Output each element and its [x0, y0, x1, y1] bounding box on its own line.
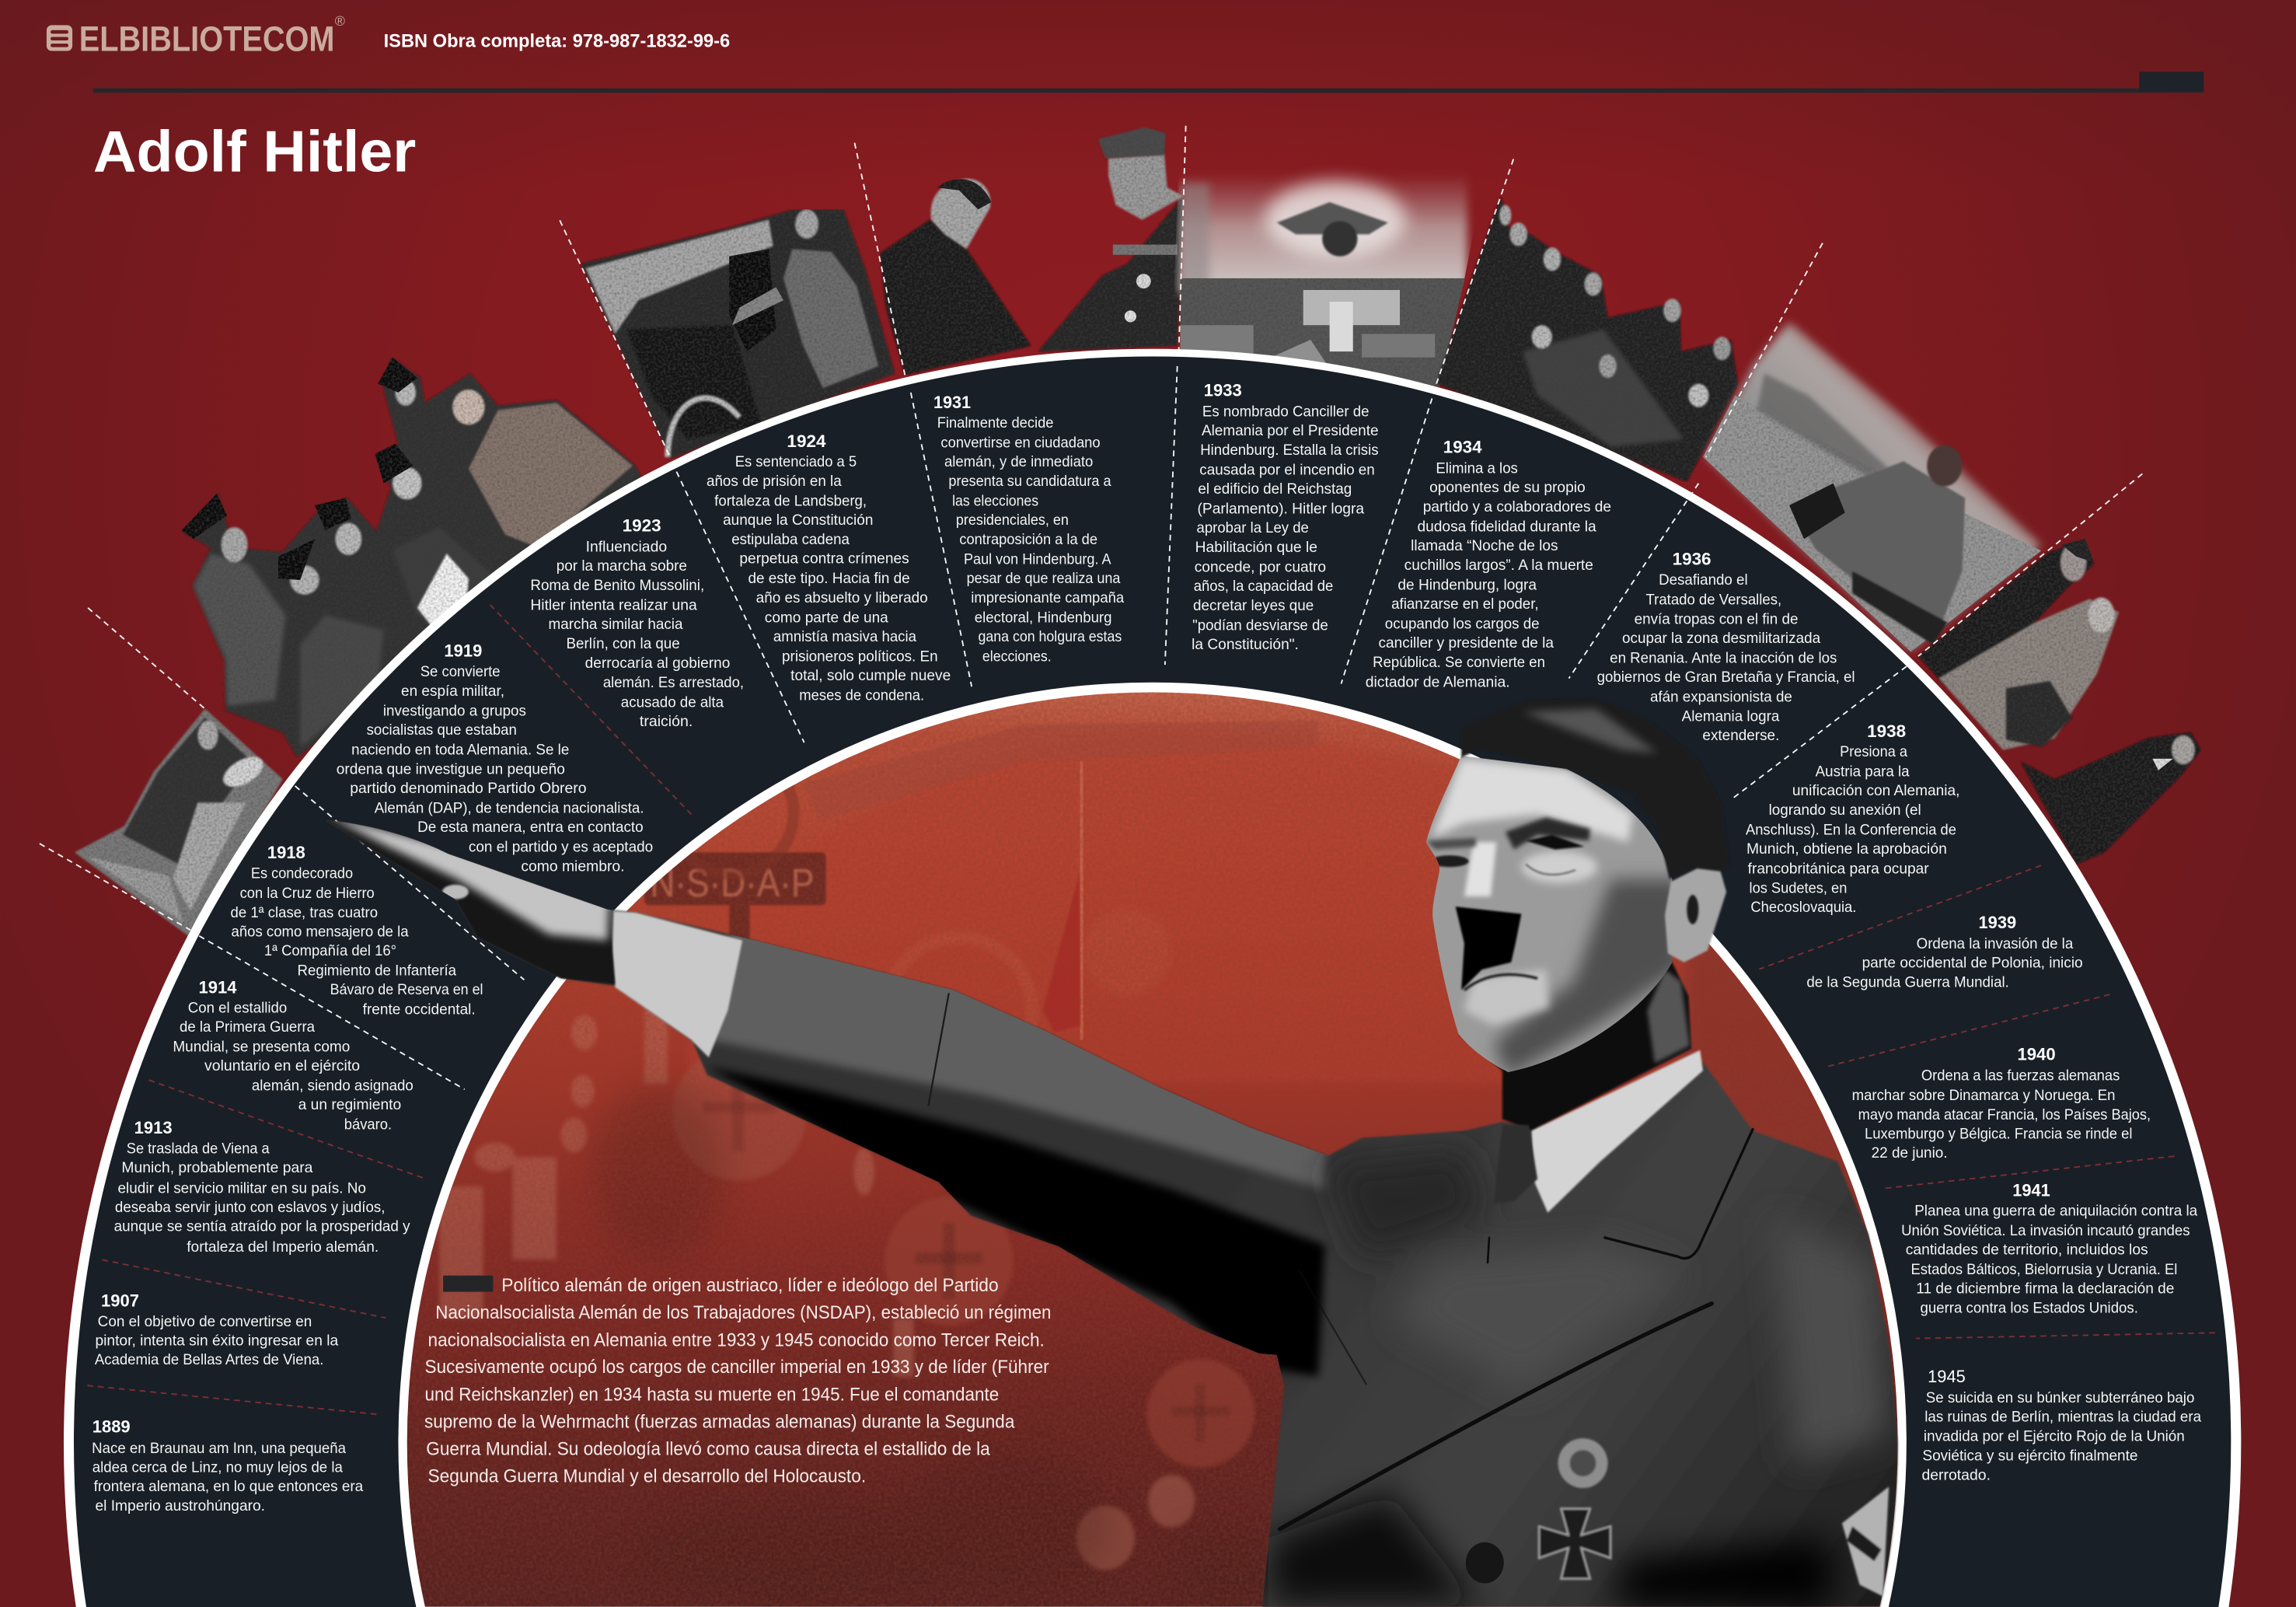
description: Planea una guerra de aniquilación contra la: [1914, 1203, 2197, 1220]
description: Roma de Benito Mussolini,: [530, 577, 704, 594]
eyes: [1526, 835, 1584, 850]
year: 1938: [1867, 721, 1906, 741]
description: ordena que investigue un pequeño: [337, 761, 565, 778]
photo: contemporaries: [1918, 539, 2201, 864]
hand: [325, 814, 615, 984]
description: [1901, 1203, 2197, 1317]
hair: [1461, 700, 1729, 879]
description: Hindenburg. Estalla la crisis: [1200, 442, 1379, 459]
panel: timeline ring: [64, 349, 2241, 1607]
description: como miembro.: [521, 858, 625, 875]
description: impresionante campaña: [971, 589, 1124, 606]
ear: [1665, 868, 1726, 962]
chin crease dark: [1464, 974, 1537, 990]
segment dividers: [87, 366, 2215, 1414]
description: deseaba servir junto con eslavos y judíos,: [115, 1199, 385, 1216]
description: de este tipo. Hacia fin de: [748, 570, 910, 587]
paragraph: und Reichskanzler) en 1934 hasta su muerte en 1945. Fue el comandante: [425, 1385, 999, 1406]
photo: world war i soldiers: [182, 358, 644, 757]
description: Hitler intenta realizar una: [530, 596, 697, 613]
paragraph: supremo de la Wehrmacht (fuerzas armadas alemanas) durante la Segunda: [424, 1412, 1015, 1432]
description: [1746, 743, 1959, 916]
hair sheen: [1523, 709, 1658, 753]
description: afán expansionista de: [1650, 688, 1792, 705]
timeline entry: 1907: [95, 1291, 338, 1368]
description: convertirse en ciudadano: [940, 434, 1101, 451]
paragraph: nacionalsocialista en Alemania entre 1933 y 1945 conocido como Tercer Reich.: [428, 1330, 1045, 1350]
description: Presiona a: [1840, 743, 1907, 760]
description: partido y a colaboradores de: [1423, 498, 1611, 515]
timeline entry: 1889: [92, 1417, 363, 1514]
description: por la marcha sobre: [557, 557, 687, 575]
year: 1941: [2012, 1181, 2050, 1200]
photo: car: [581, 209, 895, 459]
year: 1945: [1928, 1367, 1966, 1386]
description: llamada “Noche de los: [1411, 537, 1558, 554]
description: elecciones.: [982, 648, 1052, 665]
description: meses de condena.: [799, 686, 924, 704]
year: 1940: [2017, 1045, 2056, 1064]
description: los Sudetes, en: [1750, 880, 1847, 897]
year: 1936: [1673, 549, 1712, 568]
description: [1192, 403, 1379, 653]
paragraph: Segunda Guerra Mundial y el desarrollo del Holocausto.: [428, 1466, 866, 1486]
description: mayo manda atacar Francia, los Países Bajos,: [1858, 1106, 2151, 1123]
description: voluntario en el ejército: [204, 1057, 360, 1074]
description: contraposición a la de: [959, 531, 1097, 548]
logo: elbibliotecom: ®: [335, 13, 345, 29]
white dashed rays outside the arc: [40, 126, 2142, 930]
jaw shadow: [1494, 879, 1684, 1077]
description: Luxemburgo y Bélgica. Francia se rinde el: [1865, 1126, 2133, 1143]
year: 1914: [198, 977, 237, 997]
description: [337, 663, 653, 875]
iron cross: [1539, 1508, 1610, 1579]
inner ring white border: [398, 683, 1907, 1607]
description: [231, 865, 483, 1018]
description: guerra contra los Estados Unidos.: [1921, 1300, 2138, 1317]
description: decretar leyes que: [1193, 597, 1314, 614]
description: concede, por cuatro: [1195, 558, 1326, 575]
description: año es absuelto y liberado: [756, 589, 928, 606]
description: como parte de una: [765, 610, 888, 627]
description: Munich, obtiene la aprobación: [1746, 840, 1947, 858]
description: Habilitación que le: [1195, 539, 1317, 556]
description: [92, 1440, 363, 1514]
description: alemán, y de inmediato: [944, 453, 1093, 470]
description: perpetua contra crímenes: [739, 550, 909, 568]
description: Elimina a los: [1436, 459, 1518, 477]
description: Ordena la invasión de la: [1917, 935, 2073, 952]
description: (Parlamento). Hitler logra: [1197, 500, 1364, 517]
tie: [1494, 1125, 1537, 1204]
description: con el partido y es aceptado: [469, 838, 653, 855]
description: alemán, siendo asignado: [252, 1078, 413, 1095]
description: [95, 1313, 338, 1368]
description: frente occidental.: [363, 1001, 476, 1018]
photo: iron cross medals: [75, 709, 283, 938]
description: Con el objetivo de convertirse en: [98, 1313, 312, 1330]
description: Es sentenciado a 5: [735, 453, 857, 470]
description: años de prisión en la: [707, 473, 842, 490]
timeline entry: 1924: [707, 431, 951, 704]
button: [1466, 1542, 1504, 1583]
year: 1939: [1979, 913, 2016, 932]
description: logrando su anexión (el: [1769, 802, 1921, 819]
neck: [1458, 956, 1691, 1130]
header bar: [93, 72, 2204, 93]
description: invadida por el Ejército Rojo de la Unión: [1924, 1428, 2185, 1445]
isbn: ISBN Obra completa: 978-987-1832-99-6: [384, 32, 730, 52]
description: socialistas que estaban: [367, 721, 517, 739]
timeline entry: 1931: [933, 393, 1124, 665]
description: [707, 453, 951, 704]
shirt collar: [1532, 1050, 1703, 1213]
description: años como mensajero de la: [231, 924, 409, 941]
description: dictador de Alemania.: [1366, 673, 1510, 690]
year: 1933: [1204, 381, 1242, 400]
timeline entry: 1939: [1806, 913, 2083, 991]
description: partido denominado Partido Obrero: [350, 780, 587, 797]
description: acusado de alta: [621, 693, 724, 711]
timeline entry: 1918: [231, 843, 483, 1018]
description: Es nombrado Canciller de: [1202, 403, 1370, 420]
description: Nace en Braunau am Inn, una pequeña: [92, 1440, 346, 1457]
description: con la Cruz de Hierro: [240, 885, 375, 902]
brows: [1506, 817, 1590, 850]
description: de la Segunda Guerra Mundial.: [1806, 974, 2009, 991]
description: Tratado de Versalles,: [1646, 591, 1781, 608]
description: afianzarse en el poder,: [1391, 596, 1539, 613]
description: Paul von Hindenburg. A: [964, 550, 1111, 568]
description: naciendo en toda Alemania. Se le: [351, 741, 569, 758]
description: Soviética y su ejército finalmente: [1922, 1447, 2138, 1464]
description: eludir el servicio militar en su país. No: [117, 1179, 366, 1197]
year: 1889: [92, 1417, 131, 1436]
description: De esta manera, entra en contacto: [417, 819, 644, 836]
neck side light: [1647, 969, 1690, 1064]
description: 22 de junio.: [1872, 1144, 1948, 1162]
description: pintor, intenta sin éxito ingresar en la: [95, 1332, 338, 1349]
chin light: [1464, 969, 1549, 1025]
description: aldea cerca de Linz, no muy lejos de la: [92, 1459, 343, 1476]
description: Berlín, con la que: [567, 635, 680, 652]
silhouette: arm and jacket: [325, 820, 1898, 1607]
description: [1806, 935, 2083, 991]
description: Academia de Bellas Artes de Viena.: [95, 1351, 323, 1368]
description: derrotado.: [1921, 1467, 1991, 1484]
description: Bávaro de Reserva en el: [330, 981, 483, 998]
timeline entry: 1923: [530, 516, 744, 730]
description: Alemania logra: [1682, 708, 1779, 725]
description: bávaro.: [344, 1116, 392, 1133]
photo: rally crowd background: N·S·D·A·P: [650, 861, 814, 905]
description: [1597, 571, 1855, 744]
description: República. Se convierte en: [1373, 654, 1545, 671]
description: Ordena a las fuerzas alemanas: [1921, 1067, 2120, 1084]
medal badge: [1558, 1438, 1608, 1488]
description: [1921, 1389, 2201, 1484]
photo: hitler's cabinet: [1436, 196, 1738, 482]
year: 1919: [444, 641, 482, 660]
description: unificación con Alemania,: [1792, 782, 1959, 799]
paragraph: [424, 1276, 1051, 1486]
description: en Renania. Ante la inacción de los: [1610, 649, 1837, 666]
armband: [1842, 1486, 1889, 1596]
description: total, solo cumple nueve: [790, 667, 951, 684]
redaction box: [443, 1276, 493, 1292]
description: aunque la Constitución: [723, 512, 873, 529]
shirt cuff: [612, 911, 742, 1057]
description: aprobar la Ley de: [1197, 519, 1309, 536]
title: Adolf Hitler: [93, 118, 416, 183]
paragraph: Guerra Mundial. Su odeología llevó como causa directa el estallido de la: [426, 1439, 990, 1459]
ear canal: [1687, 895, 1698, 924]
description: Es condecorado: [251, 865, 353, 882]
description: Mundial, se presenta como: [173, 1039, 350, 1056]
description: Con el estallido: [188, 1000, 287, 1017]
description: extenderse.: [1702, 727, 1779, 744]
description: "podían desviarse de: [1192, 617, 1328, 634]
eye bag line: [1526, 864, 1575, 875]
description: [530, 538, 744, 730]
timeline entry: 1936: [1597, 549, 1855, 744]
photo: rally crowd background: [396, 688, 1933, 1607]
timeline entry: 1938: [1746, 721, 1959, 916]
description: Influenciado: [586, 538, 667, 555]
description: Desafiando el: [1659, 571, 1748, 589]
timeline entry: 1941: [1901, 1181, 2197, 1317]
description: [937, 414, 1124, 665]
description: presenta su candidatura a: [948, 473, 1111, 490]
description: cantidades de territorio, incluidos los: [1906, 1242, 2148, 1259]
description: 1ª Compañía del 16°: [264, 942, 396, 959]
description: Alemania por el Presidente: [1202, 422, 1379, 439]
timeline entry: 1945: [1921, 1367, 2201, 1484]
description: Se convierte: [420, 663, 501, 680]
description: frontera alemana, en lo que entonces era: [94, 1478, 363, 1495]
description: aunque se sentía atraído por la prosperidad y: [114, 1217, 410, 1235]
description: [114, 1141, 410, 1256]
timeline entry: 1914: [173, 977, 413, 1133]
description: Austria para la: [1816, 763, 1910, 780]
description: Estados Bálticos, Bielorrusia y Ucrania. El: [1911, 1261, 2177, 1278]
description: [173, 1000, 413, 1133]
nose highlight: [1464, 842, 1496, 896]
intro text block: [424, 1276, 1051, 1486]
timeline entry: 1933: [1192, 381, 1379, 653]
lapels: [1280, 1129, 1753, 1529]
description: prisioneros políticos. En: [782, 648, 938, 665]
description: en espía militar,: [401, 683, 504, 700]
description: las elecciones: [952, 493, 1038, 510]
description: estipulaba cadena: [731, 531, 850, 548]
year: 1924: [787, 431, 826, 451]
paragraph: Político alemán de origen austriaco, líder e ideólogo del Partido: [501, 1276, 999, 1296]
year: 1931: [933, 393, 971, 412]
description: Anschluss). En la Conferencia de: [1746, 821, 1956, 838]
timeline entry: 1934: [1366, 438, 1611, 690]
description: derrocaría al gobierno: [585, 655, 730, 672]
description: presidenciales, en: [956, 512, 1069, 529]
description: las ruinas de Berlín, mientras la ciudad era: [1924, 1408, 2201, 1425]
description: traición.: [640, 713, 693, 730]
sleeve seam: [928, 993, 949, 1106]
description: gobiernos de Gran Bretaña y Francia, el: [1597, 669, 1855, 686]
description: alemán. Es arrestado,: [603, 674, 744, 691]
photo: reichstag: [1180, 173, 1467, 396]
description: pesar de que realiza una: [967, 570, 1120, 587]
description: Unión Soviética. La invasión incautó grandes: [1901, 1222, 2190, 1239]
paragraph: Sucesivamente ocupó los cargos de canciller imperial en 1933 y de líder (Führer: [425, 1357, 1049, 1378]
description: francobritánica para ocupar: [1748, 860, 1929, 877]
year: 1907: [101, 1291, 139, 1310]
description: envía tropas con el fin de: [1635, 611, 1799, 628]
description: Finalmente decide: [937, 414, 1054, 431]
main figure: saluting portrait: [325, 700, 1898, 1607]
photo: hitler and hindenburg: [880, 128, 1183, 375]
description: amnistía masiva hacia: [773, 628, 916, 645]
timeline entry: 1919: [337, 641, 653, 875]
description: causada por el incendio en: [1199, 461, 1375, 478]
description: de 1ª clase, tras cuatro: [231, 904, 378, 921]
description: dudosa fidelidad durante la: [1417, 518, 1596, 535]
description: ocupar la zona desmilitarizada: [1622, 630, 1820, 647]
description: canciller y presidente de la: [1379, 634, 1554, 652]
moustache: [1456, 907, 1521, 990]
logo: elbibliotecom: ELBIBLIOTECOM: [79, 19, 335, 59]
description: electoral, Hindenburg: [975, 610, 1111, 627]
year: 1913: [134, 1118, 173, 1137]
description: Se traslada de Viena a: [127, 1141, 270, 1158]
sleeve and jacket shading: [706, 923, 1889, 1607]
description: cuchillos largos”. A la muerte: [1404, 557, 1593, 574]
description: gana con holgura estas: [978, 628, 1122, 645]
timeline entry: 1913: [114, 1118, 410, 1256]
description: Se suicida en su búnker subterráneo bajo: [1926, 1389, 2195, 1406]
description: marchar sobre Dinamarca y Noruega. En: [1852, 1087, 2115, 1104]
description: el edificio del Reichstag: [1198, 480, 1352, 498]
year: 1934: [1443, 438, 1482, 457]
description: de Hindenburg, logra: [1397, 576, 1537, 593]
description: Alemán (DAP), de tendencia nacionalista.: [375, 799, 644, 816]
description: a un regimiento: [298, 1096, 401, 1113]
description: parte occidental de Polonia, inicio: [1862, 954, 2083, 971]
description: 11 de diciembre firma la declaración de: [1916, 1280, 2175, 1297]
year: 1923: [623, 516, 661, 536]
description: oponentes de su propio: [1429, 479, 1586, 496]
description: ocupando los cargos de: [1385, 615, 1540, 632]
description: [1366, 459, 1611, 690]
forehead highlight: [1432, 759, 1633, 842]
timeline entry: 1940: [1852, 1045, 2151, 1162]
description: de la Primera Guerra: [180, 1018, 315, 1036]
year: 1918: [267, 843, 305, 862]
description: Checoslovaquia.: [1750, 899, 1856, 916]
paragraph: Nacionalsocialista Alemán de los Trabajadores (NSDAP), estableció un régimen: [435, 1303, 1051, 1323]
description: investigando a grupos: [383, 702, 526, 719]
description: marcha similar hacia: [549, 616, 683, 633]
description: [1852, 1067, 2151, 1162]
photo: rally: [1703, 322, 2041, 652]
description: fortaleza de Landsberg,: [714, 493, 867, 510]
description: Munich, probablemente para: [121, 1159, 313, 1176]
description: Regimiento de Infantería: [297, 962, 456, 980]
face: [1426, 756, 1673, 1072]
description: años, la capacidad de: [1194, 578, 1333, 595]
description: la Constitución".: [1192, 636, 1299, 653]
under eye and cheek highlight: [1521, 851, 1597, 883]
description: fortaleza del Imperio alemán.: [187, 1238, 379, 1256]
description: el Imperio austrohúngaro.: [95, 1497, 265, 1514]
